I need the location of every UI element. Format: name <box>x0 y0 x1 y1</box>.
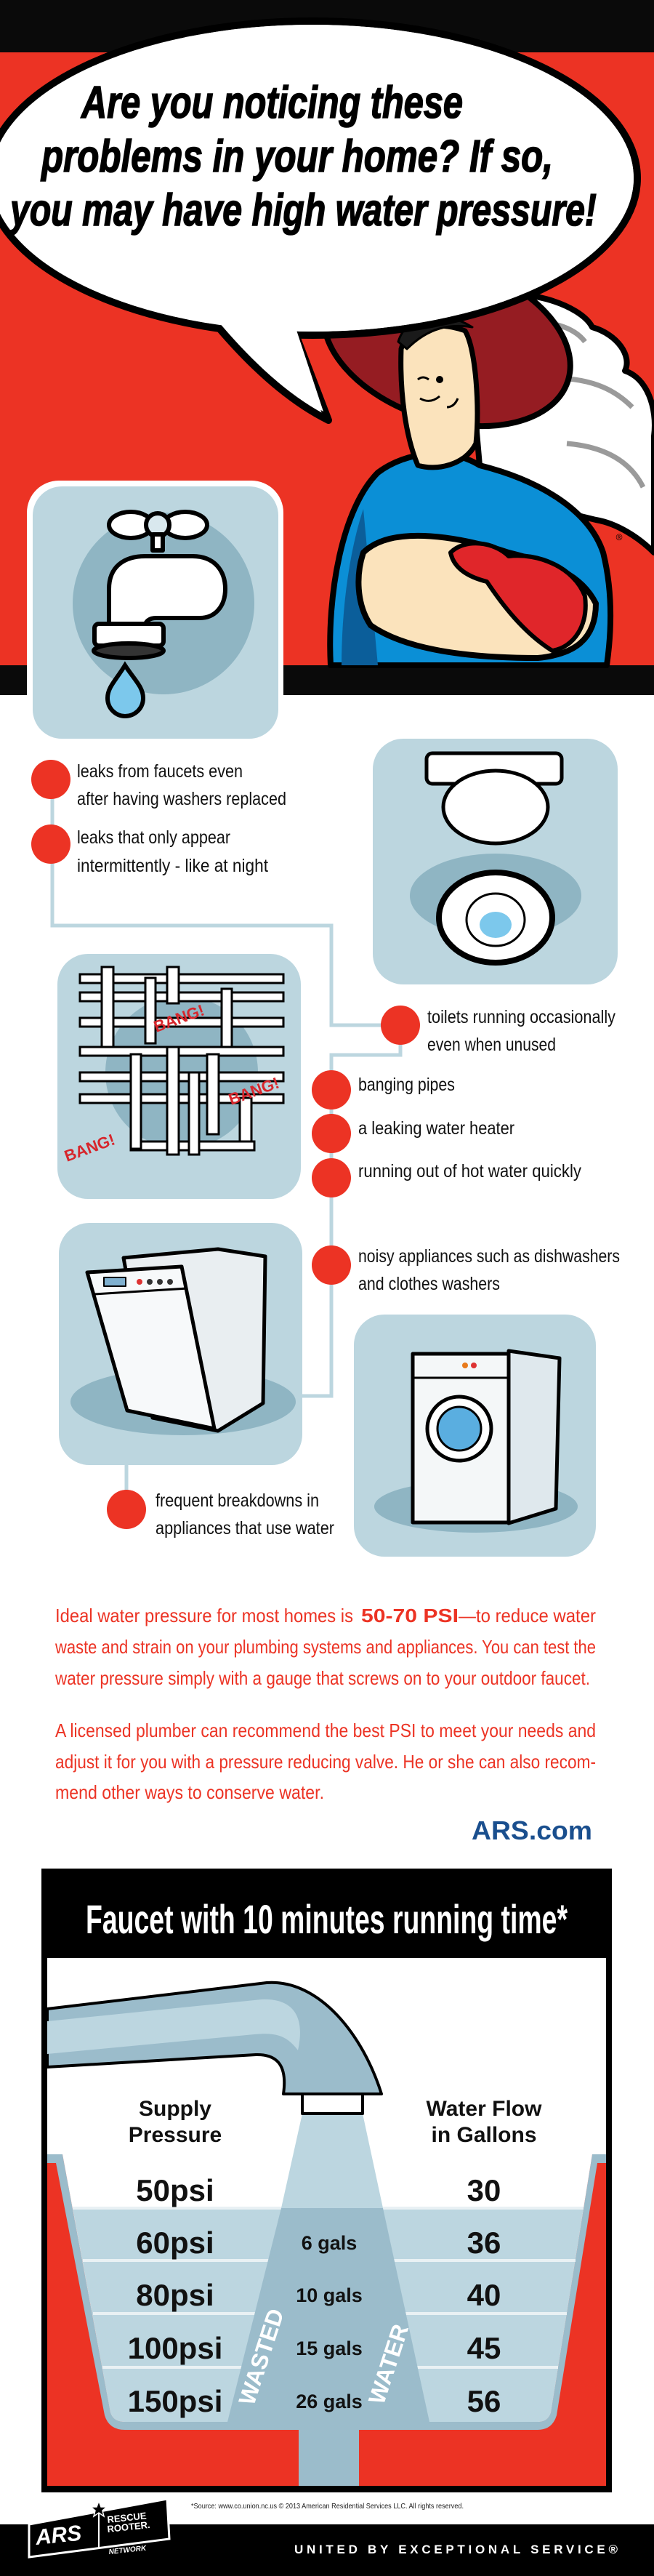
text block: licensed plumber: mend other ways to conserve water. <box>55 1781 324 1803</box>
bullet: faucet leaks: after having washers replaced <box>77 789 286 809</box>
bullet: frequent breakdowns: appliances that use water <box>156 1518 334 1538</box>
bullets: pipes, heater, hot water: running out of hot water quickly <box>358 1161 581 1181</box>
pressure values: 80psi <box>136 2278 214 2312</box>
hat <box>302 228 592 456</box>
registered mark: ® <box>616 532 623 542</box>
bullets: pipes, heater, hot water <box>312 1070 581 1197</box>
bullet: faucet leaks <box>31 760 286 809</box>
pressure values: 100psi <box>128 2331 222 2365</box>
panel: washing machine <box>354 1315 596 1557</box>
source note: *Source: www.co.union.nc.us © 2013 American Residential Services LLC. All rights reserved. <box>191 2502 464 2511</box>
icon: washer <box>413 1351 560 1523</box>
bullets: pipes, heater, hot water: a leaking water heater <box>358 1118 514 1139</box>
bullet: frequent breakdowns: frequent breakdowns in <box>156 1490 319 1511</box>
bullet: intermittent leaks <box>31 824 268 876</box>
wasted gallons: 6 gals <box>302 2232 357 2254</box>
text block: ideal pressure: —to reduce water <box>459 1605 596 1626</box>
wasted gallons <box>296 2232 363 2412</box>
bullet: intermittent leaks: intermittently - like at night <box>77 856 268 876</box>
BANG labels: BANG! <box>226 1074 281 1109</box>
icon: faucet <box>94 512 225 658</box>
text block: ideal pressure <box>54 1605 596 1689</box>
column headers <box>129 2097 542 2147</box>
pressure values: 60psi <box>136 2226 214 2260</box>
text block: ideal pressure: 50-70 PSI <box>361 1605 459 1626</box>
speech bubble <box>0 21 637 420</box>
bullet: frequent breakdowns <box>107 1490 334 1538</box>
text block: licensed plumber <box>55 1720 596 1803</box>
title: Are you noticing these <box>80 78 463 128</box>
faucet spout <box>47 1983 382 2114</box>
bullet: noisy appliances <box>312 1245 620 1294</box>
panel: pipes <box>57 954 301 1199</box>
wasted water labels <box>233 2306 413 2408</box>
flow values: 36 <box>467 2226 501 2260</box>
bullet: noisy appliances: and clothes washers <box>358 1274 500 1294</box>
chart: faucet with 10 minutes <box>41 1869 612 2492</box>
BANG labels: BANG! <box>62 1131 117 1165</box>
bullet: intermittent leaks: leaks that only appear <box>77 827 230 848</box>
logo: ARS Rescue Rooter: ROOTER. <box>107 2519 150 2535</box>
wasted gallons: 10 gals <box>296 2284 363 2306</box>
pressure values <box>128 2173 222 2418</box>
column headers: Supply <box>139 2097 211 2121</box>
ARS.com link: ARS.com <box>472 1815 592 1845</box>
red surround and basin <box>47 2154 606 2486</box>
gloves <box>451 543 586 651</box>
flow values: 30 <box>467 2173 501 2207</box>
icon: pipes <box>80 967 283 1155</box>
BANG labels: BANG! <box>151 1001 206 1036</box>
header background <box>0 0 654 695</box>
bullet: toilets running: even when unused <box>427 1035 556 1055</box>
water stream <box>281 2114 383 2208</box>
icon: water drop <box>108 665 143 716</box>
column headers: Water Flow <box>427 2097 542 2121</box>
arms <box>358 536 596 658</box>
shirt <box>330 454 610 665</box>
bullet: faucet leaks: leaks from faucets even <box>77 761 243 782</box>
connector lines <box>52 779 400 1509</box>
wasted gallons: 15 gals <box>296 2338 363 2359</box>
logo: ARS Rescue Rooter: NETWORK <box>108 2545 147 2556</box>
icon: toilet <box>427 753 562 963</box>
text block: ideal pressure: Ideal water pressure for most homes is <box>55 1605 353 1626</box>
text block: licensed plumber: A licensed plumber can recommend the best PSI to meet your needs and <box>55 1720 596 1741</box>
wasted water labels: WASTED <box>233 2306 289 2408</box>
column headers: Pressure <box>129 2123 222 2147</box>
row separators <box>73 2208 584 2367</box>
wing <box>465 294 654 553</box>
logo: ARS Rescue Rooter: ARS <box>33 2521 83 2550</box>
title <box>9 78 597 236</box>
panel: faucet <box>27 481 283 745</box>
character: plumber hero <box>302 228 654 665</box>
tagline: UNITED BY EXCEPTIONAL SERVICE® <box>294 2543 621 2556</box>
panel: dishwasher <box>59 1223 302 1465</box>
pressure values: 150psi <box>128 2384 222 2418</box>
bullets: pipes, heater, hot water: banging pipes <box>358 1075 455 1095</box>
logo: ARS Rescue Rooter: RESCUE <box>107 2510 148 2525</box>
bullet: toilets running: toilets running occasionally <box>427 1007 615 1027</box>
pressure values: 50psi <box>136 2173 214 2207</box>
logo: ARS Rescue Rooter <box>29 2499 169 2557</box>
flow values <box>467 2173 501 2418</box>
icon: dishwasher <box>87 1249 265 1431</box>
BANG labels <box>62 1001 281 1165</box>
footer band <box>0 2524 654 2576</box>
panel: toilet <box>373 739 618 984</box>
face <box>401 326 477 468</box>
wasted gallons: 26 gals <box>296 2391 363 2412</box>
flow values: 45 <box>467 2331 501 2365</box>
column headers: in Gallons <box>431 2123 537 2147</box>
flow values: 56 <box>467 2384 501 2418</box>
flow values: 40 <box>467 2278 501 2312</box>
bullet: toilets running <box>381 1006 615 1055</box>
wasted water labels: WATER <box>363 2321 413 2407</box>
